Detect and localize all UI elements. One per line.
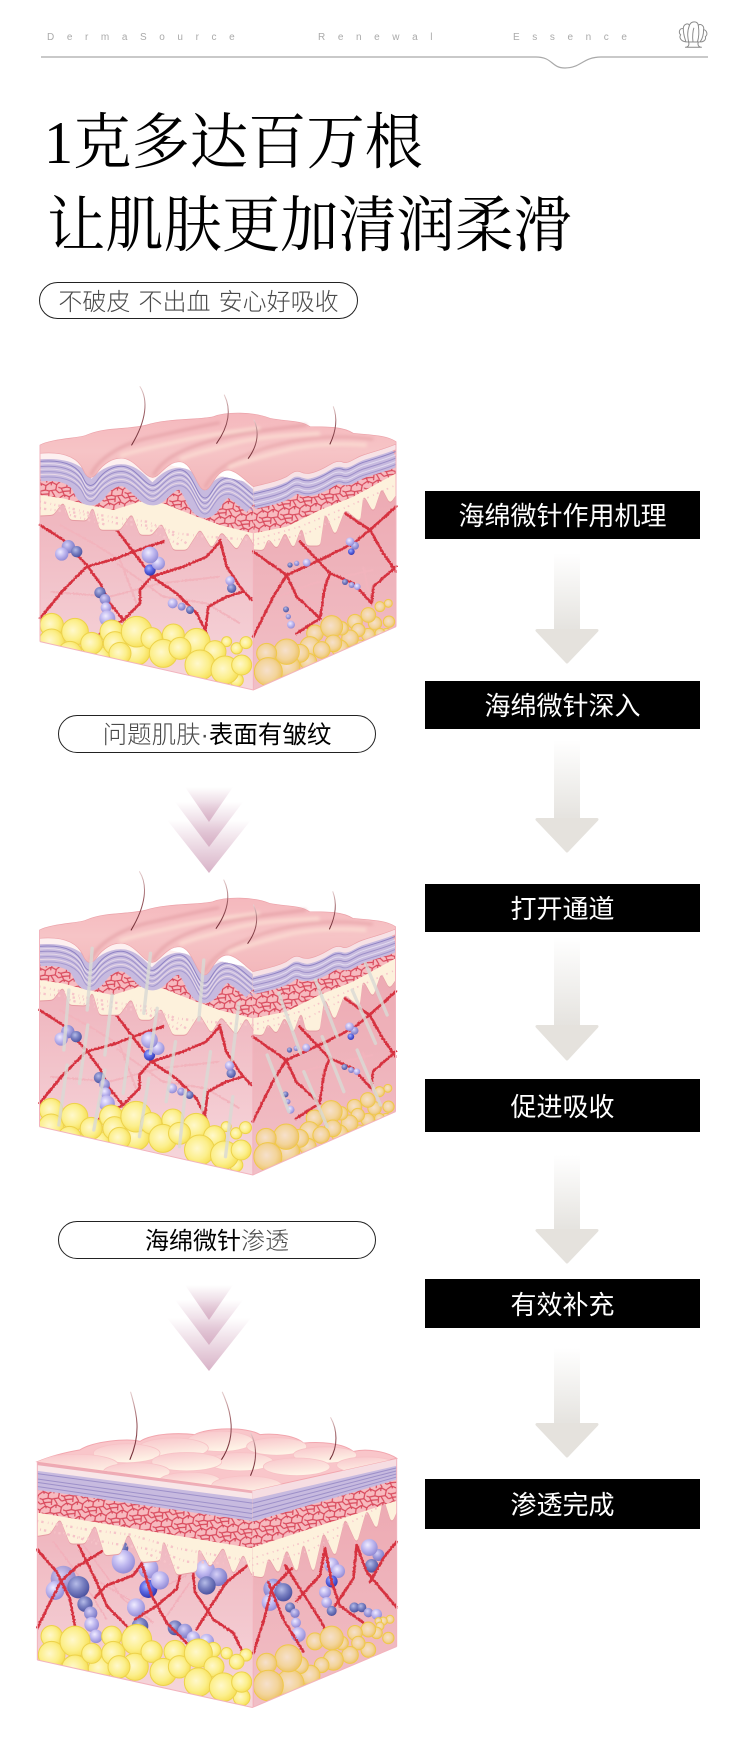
step label: effective replenishment: 有效补充 bbox=[510, 1290, 614, 1320]
arrow: step 2 to 3 bbox=[536, 760, 598, 852]
step label: needles go deep: 海绵微针深入 bbox=[484, 691, 640, 721]
microneedles bbox=[58, 948, 387, 1157]
pill: problem skin caption: 问题肌肤·表面有皱纹 bbox=[103, 722, 331, 749]
arrow: step 4 to 5 bbox=[536, 1174, 598, 1264]
dermis and epidermis layers: left face bbox=[30, 1465, 260, 1576]
pill: microneedle penetration caption: 海绵微针渗透 bbox=[145, 1228, 289, 1255]
icon: coral shell logo bbox=[678, 21, 708, 48]
fat cells right face bbox=[253, 1615, 394, 1701]
brand word: Essence: Essence bbox=[513, 32, 640, 43]
illustration: microneedles penetrating skin bbox=[38, 871, 398, 1176]
fat cells left face bbox=[38, 1624, 252, 1706]
pill: subtitle: 不破皮 不出血 安心好吸收 bbox=[58, 289, 339, 316]
step label: open channels: 打开通道 bbox=[510, 894, 614, 924]
chevron arrow: down bbox=[172, 791, 246, 873]
brand word: Renewal: Renewal bbox=[318, 32, 445, 43]
step label: penetration complete: 渗透完成 bbox=[510, 1490, 614, 1520]
faint vessels bbox=[53, 1538, 373, 1623]
illustration: problem skin cross-section with wrinkles bbox=[38, 386, 398, 690]
step label: mechanism title bbox=[425, 491, 700, 539]
dermis and epidermis layers: right face bbox=[247, 1458, 403, 1578]
title bbox=[44, 109, 572, 259]
step label: mechanism title: 海绵微针作用机理 bbox=[458, 501, 666, 531]
title line 2: 让肌肤更加清润柔滑 bbox=[47, 192, 572, 259]
cells bbox=[46, 1539, 384, 1649]
pill: problem skin caption bbox=[58, 715, 376, 753]
step label: needles go deep bbox=[425, 681, 700, 729]
chevron arrow: down bbox=[172, 1289, 246, 1371]
capillaries bbox=[37, 1541, 397, 1653]
step label: promote absorption bbox=[425, 1079, 700, 1132]
brand word: DermaSource: DermaSource bbox=[47, 32, 247, 43]
arrow: step 1 to 2 bbox=[536, 573, 598, 664]
arrow: step 3 to 4 bbox=[536, 960, 598, 1060]
pill: subtitle bbox=[39, 282, 358, 319]
title line 1: 1克多达百万根 bbox=[44, 109, 423, 176]
header: brand tracking text bbox=[47, 32, 640, 43]
illustration: smooth restored skin bbox=[36, 1392, 399, 1708]
header divider with dip bbox=[41, 56, 708, 69]
step label: effective replenishment bbox=[425, 1279, 700, 1328]
pill: microneedle penetration caption bbox=[58, 1221, 376, 1259]
hairs bbox=[130, 1392, 336, 1475]
quilted top surface bbox=[35, 1429, 397, 1495]
step label: penetration complete bbox=[425, 1479, 700, 1529]
step label: promote absorption: 促进吸收 bbox=[510, 1092, 614, 1122]
arrow: step 5 to 6 bbox=[536, 1367, 598, 1458]
step label: open channels bbox=[425, 884, 700, 932]
